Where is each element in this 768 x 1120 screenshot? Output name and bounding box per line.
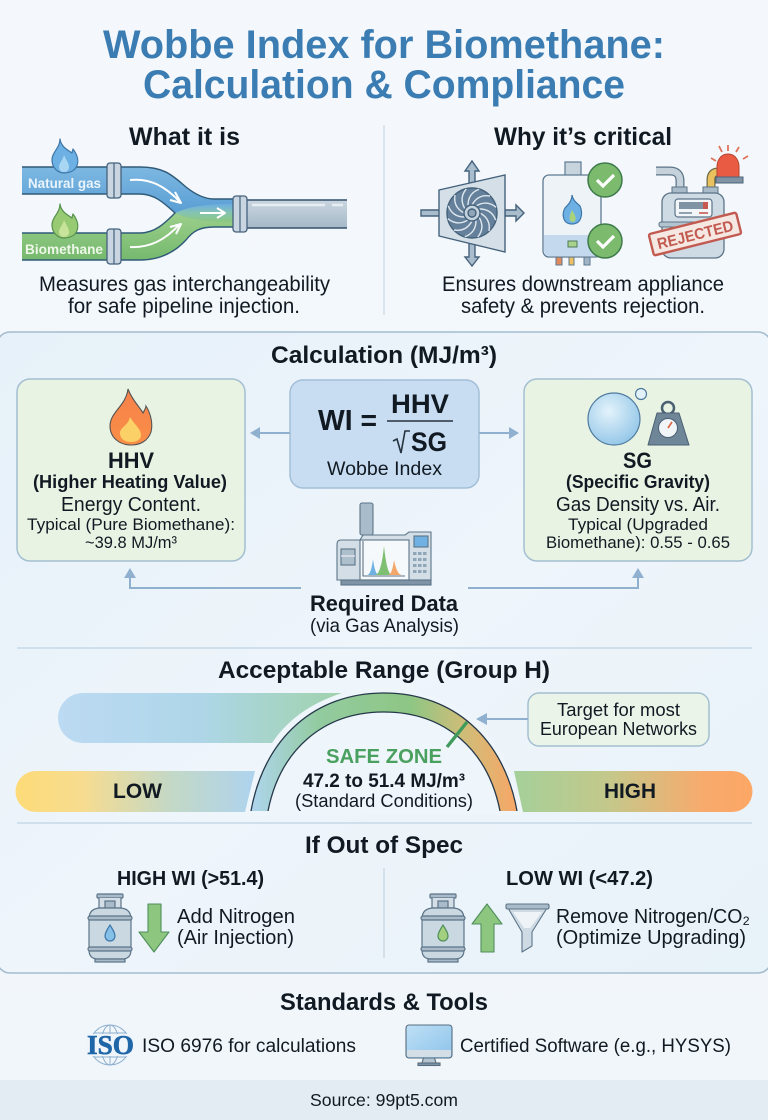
description: what it is: for safe pipeline injection. [68, 295, 300, 318]
footer: Source: 99pt5.com [310, 1090, 458, 1110]
text: HHV: (Higher Heating Value) [33, 472, 227, 492]
gauge upper band [58, 693, 342, 743]
text: HHV: Energy Content. [61, 494, 201, 516]
text: required data: Required Data [310, 591, 459, 616]
icon: ISO logo: ISO [87, 1030, 134, 1060]
section: why it's critical [421, 123, 748, 318]
arrow: data to SG [468, 568, 644, 588]
section: standards and tools [86, 989, 731, 1066]
icon: turbine fan [421, 161, 524, 266]
gauge high bar [514, 771, 752, 812]
heading: high WI: HIGH WI (>51.4) [117, 868, 264, 890]
chart: acceptable range gauge [16, 689, 752, 815]
block: high WI [88, 868, 295, 962]
text: certified software: Certified Software (e.g., HYSYS) [460, 1036, 731, 1057]
icon: bubble and weight [588, 388, 689, 445]
text: HHV: ~39.8 MJ/m³ [85, 533, 177, 552]
gauge safe zone text: (Standard Conditions) [295, 791, 473, 811]
description: what it is [39, 273, 330, 318]
text: remove nitrogen: Remove Nitrogen/CO₂ [556, 906, 750, 928]
description: why it's critical [442, 273, 724, 318]
text: SG: Biomethane): 0.55 - 0.65 [546, 533, 730, 552]
panel: formula: WI = [318, 405, 377, 437]
panel: HHV [17, 379, 245, 561]
arrow: formula to SG [479, 427, 519, 439]
text: ISO 6976: ISO 6976 for calculations [142, 1036, 356, 1057]
gauge low bar: LOW [113, 780, 162, 803]
text: add nitrogen: Add Nitrogen [177, 906, 295, 928]
icon: merging gas pipes [22, 139, 347, 264]
gauge high bar: HIGH [604, 780, 656, 803]
gauge safe zone text: SAFE ZONE [326, 746, 442, 768]
icon: gas cylinder blue drop [88, 894, 132, 962]
text: SG: (Specific Gravity) [566, 472, 710, 492]
gauge low bar [16, 771, 255, 812]
text: remove nitrogen [556, 906, 750, 949]
label: natural gas: Natural gas [28, 176, 101, 191]
gauge safe zone text: 47.2 to 51.4 MJ/m³ [303, 771, 465, 792]
icon: boiler with checks [543, 162, 622, 265]
icon: computer monitor [406, 1025, 452, 1066]
text: add nitrogen [177, 906, 295, 949]
label: biomethane: Biomethane [25, 242, 103, 257]
heading: acceptable range: Acceptable Range (Group H) [218, 657, 550, 684]
icon: rejected gas meter with alarm: REJECTED [655, 218, 735, 253]
heading: what it is: What it is [129, 123, 240, 151]
text: add nitrogen: (Air Injection) [177, 927, 294, 949]
icon: arrow down [139, 904, 169, 952]
panel: formula: HHV [391, 389, 449, 419]
panel: main calculation, range and out-of-spec [0, 332, 768, 973]
text: SG: Typical (Upgraded [568, 515, 708, 534]
text: SG: Gas Density vs. Air. [556, 494, 720, 516]
arrow: callout to gauge [476, 713, 528, 725]
text: SG [546, 448, 730, 552]
heading: low WI: LOW WI (<47.2) [506, 868, 653, 890]
icon: rejected gas meter with alarm [649, 145, 748, 258]
icon: filter funnel [506, 904, 549, 952]
panel: formula: Wobbe Index [327, 458, 442, 480]
text: remove nitrogen: (Optimize Upgrading) [556, 927, 746, 949]
title: Calculation & Compliance [143, 63, 625, 107]
heading: calculation: Calculation (MJ/m³) [271, 342, 497, 369]
callout: target networks [528, 693, 709, 746]
panel: formula [290, 380, 479, 488]
description: what it is: Measures gas interchangeability [39, 273, 330, 296]
icon: gas chromatograph [337, 503, 431, 585]
panel: formula: SG [411, 427, 447, 457]
heading: why it's critical: Why it’s critical [494, 123, 672, 151]
text: required data [310, 591, 459, 637]
panel: SG [524, 379, 752, 561]
section: what it is [22, 123, 347, 318]
block: low WI [421, 868, 750, 962]
text: HHV: Typical (Pure Biomethane): [27, 515, 235, 534]
icon: blue flame [52, 139, 78, 173]
text: SG: SG [623, 448, 652, 473]
callout: target networks: Target for most [557, 700, 680, 720]
icon: gas cylinder green drop [421, 894, 465, 962]
text: HHV: HHV [108, 448, 154, 473]
description: why it's critical: Ensures downstream appliance [442, 273, 724, 296]
icon: arrow up [472, 904, 502, 952]
description: why it's critical: safety & prevents rejection. [461, 295, 705, 318]
text: HHV [27, 448, 235, 552]
text: required data: (via Gas Analysis) [310, 615, 459, 637]
footer [0, 1080, 768, 1120]
icon: flame [110, 389, 152, 445]
title: Wobbe Index for Biomethane: [103, 23, 665, 67]
heading: standards and tools: Standards & Tools [280, 989, 488, 1016]
arrow: data to HHV [124, 568, 301, 588]
heading: if out of spec: If Out of Spec [305, 832, 463, 859]
arrow: formula to HHV [250, 427, 290, 439]
callout: target networks: European Networks [540, 719, 697, 739]
gauge safe arch [245, 689, 523, 815]
icon: green flame [52, 204, 78, 238]
gauge safe zone text [295, 746, 473, 811]
title [103, 23, 665, 107]
